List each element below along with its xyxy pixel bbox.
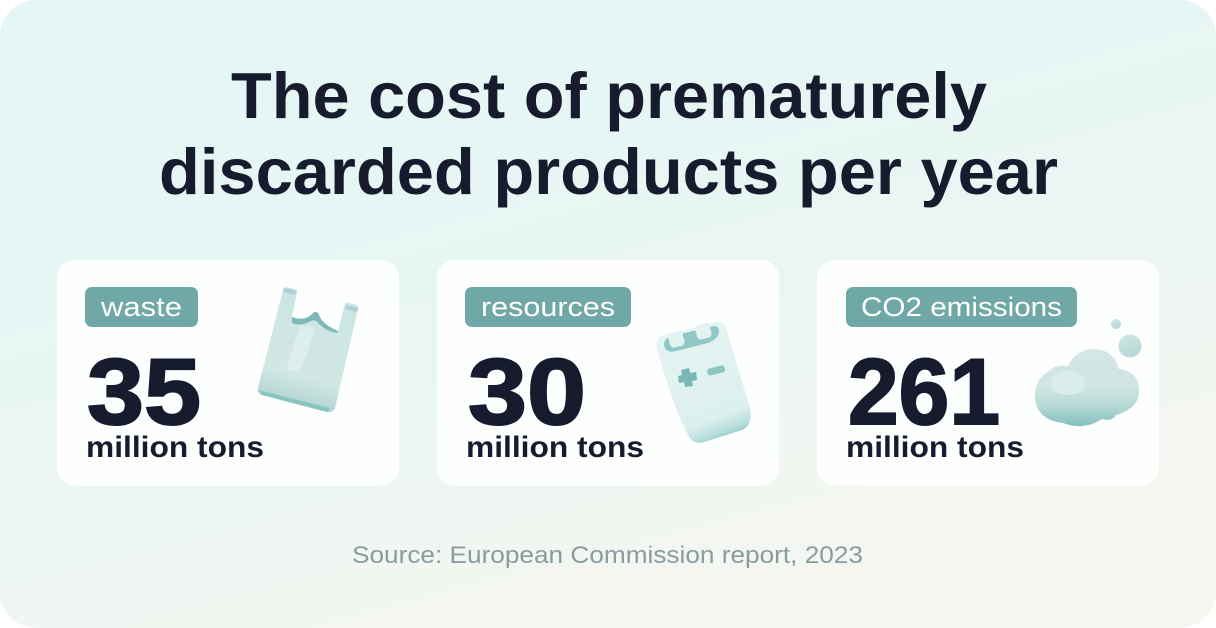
tag: resources <box>465 287 631 327</box>
title: discarded products per year <box>159 135 1058 208</box>
panel: waste <box>57 260 399 486</box>
tag: waste: waste <box>100 292 182 322</box>
tag: CO2 emissions: CO2 emissions <box>861 292 1062 322</box>
number: 30: 30 <box>468 339 586 444</box>
plus sign <box>678 368 697 387</box>
title <box>159 59 1058 208</box>
tag: CO2 emissions <box>846 287 1077 327</box>
icon: plastic bag <box>258 287 358 412</box>
unit: million tons: million tons <box>466 431 644 464</box>
tag: waste <box>85 287 198 327</box>
number: 35: 35 <box>87 339 201 444</box>
unit: million tons: million tons <box>846 431 1024 464</box>
source note: Source: European Commission report, 2023 <box>352 542 863 569</box>
number: 261: 261 <box>848 339 1000 444</box>
icon: cloud <box>1035 319 1142 426</box>
title: The cost of prematurely <box>231 59 987 132</box>
tag: resources: resources <box>481 292 615 322</box>
panel: CO2 emissions <box>817 260 1159 486</box>
panel: resources <box>437 260 779 486</box>
icon: battery <box>656 322 751 443</box>
unit: million tons: million tons <box>86 431 264 464</box>
minus sign <box>707 365 726 376</box>
